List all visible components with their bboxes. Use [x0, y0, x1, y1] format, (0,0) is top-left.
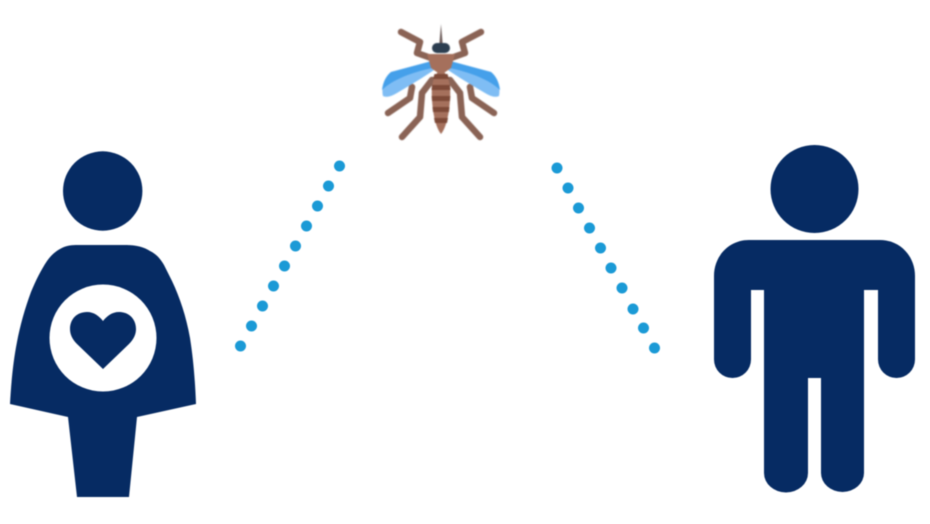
mosquito thorax [427, 54, 455, 75]
mosquito wings [382, 61, 434, 97]
mosquito abdomen [432, 70, 450, 134]
mosquito legs [388, 32, 494, 137]
icon: pregnant woman [10, 151, 196, 497]
icon: mosquito [382, 24, 500, 137]
mosquito proboscis [439, 24, 443, 48]
dotted line: mosquito to man [552, 162, 660, 354]
mosquito head [432, 43, 450, 53]
dotted line: woman to mosquito [235, 160, 345, 352]
icon: man [714, 145, 915, 492]
